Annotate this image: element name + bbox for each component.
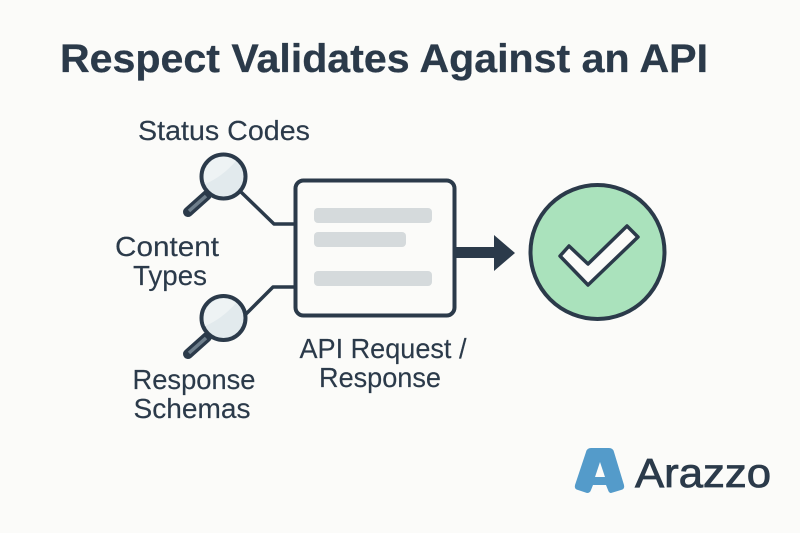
label: response: Response bbox=[132, 364, 256, 395]
logo mark bbox=[575, 448, 624, 493]
icon: magnifier bottom bbox=[188, 296, 246, 354]
arrow bbox=[456, 235, 515, 271]
content line 3 bbox=[314, 271, 432, 286]
logo wordmark: Arazzo bbox=[635, 450, 771, 496]
content line 2 bbox=[314, 232, 406, 247]
icon: magnifier top bbox=[188, 154, 246, 212]
icon: success check bbox=[530, 185, 664, 319]
label: status codes: Status Codes bbox=[138, 115, 310, 146]
panel: API request and response box bbox=[296, 180, 454, 316]
connector: top magnifier to box bbox=[241, 192, 294, 224]
label: response: Response bbox=[319, 362, 441, 393]
connector: bottom magnifier to box bbox=[246, 287, 294, 314]
label: API request: API Request / bbox=[300, 333, 467, 364]
label: content types second line: Types bbox=[133, 260, 207, 291]
title: Respect Validates Against an API bbox=[60, 37, 708, 81]
label: schemas: Schemas bbox=[134, 393, 250, 424]
label: content types: Content bbox=[115, 231, 219, 262]
logo: Arazzo bbox=[575, 448, 771, 496]
content line 1 bbox=[314, 208, 432, 223]
